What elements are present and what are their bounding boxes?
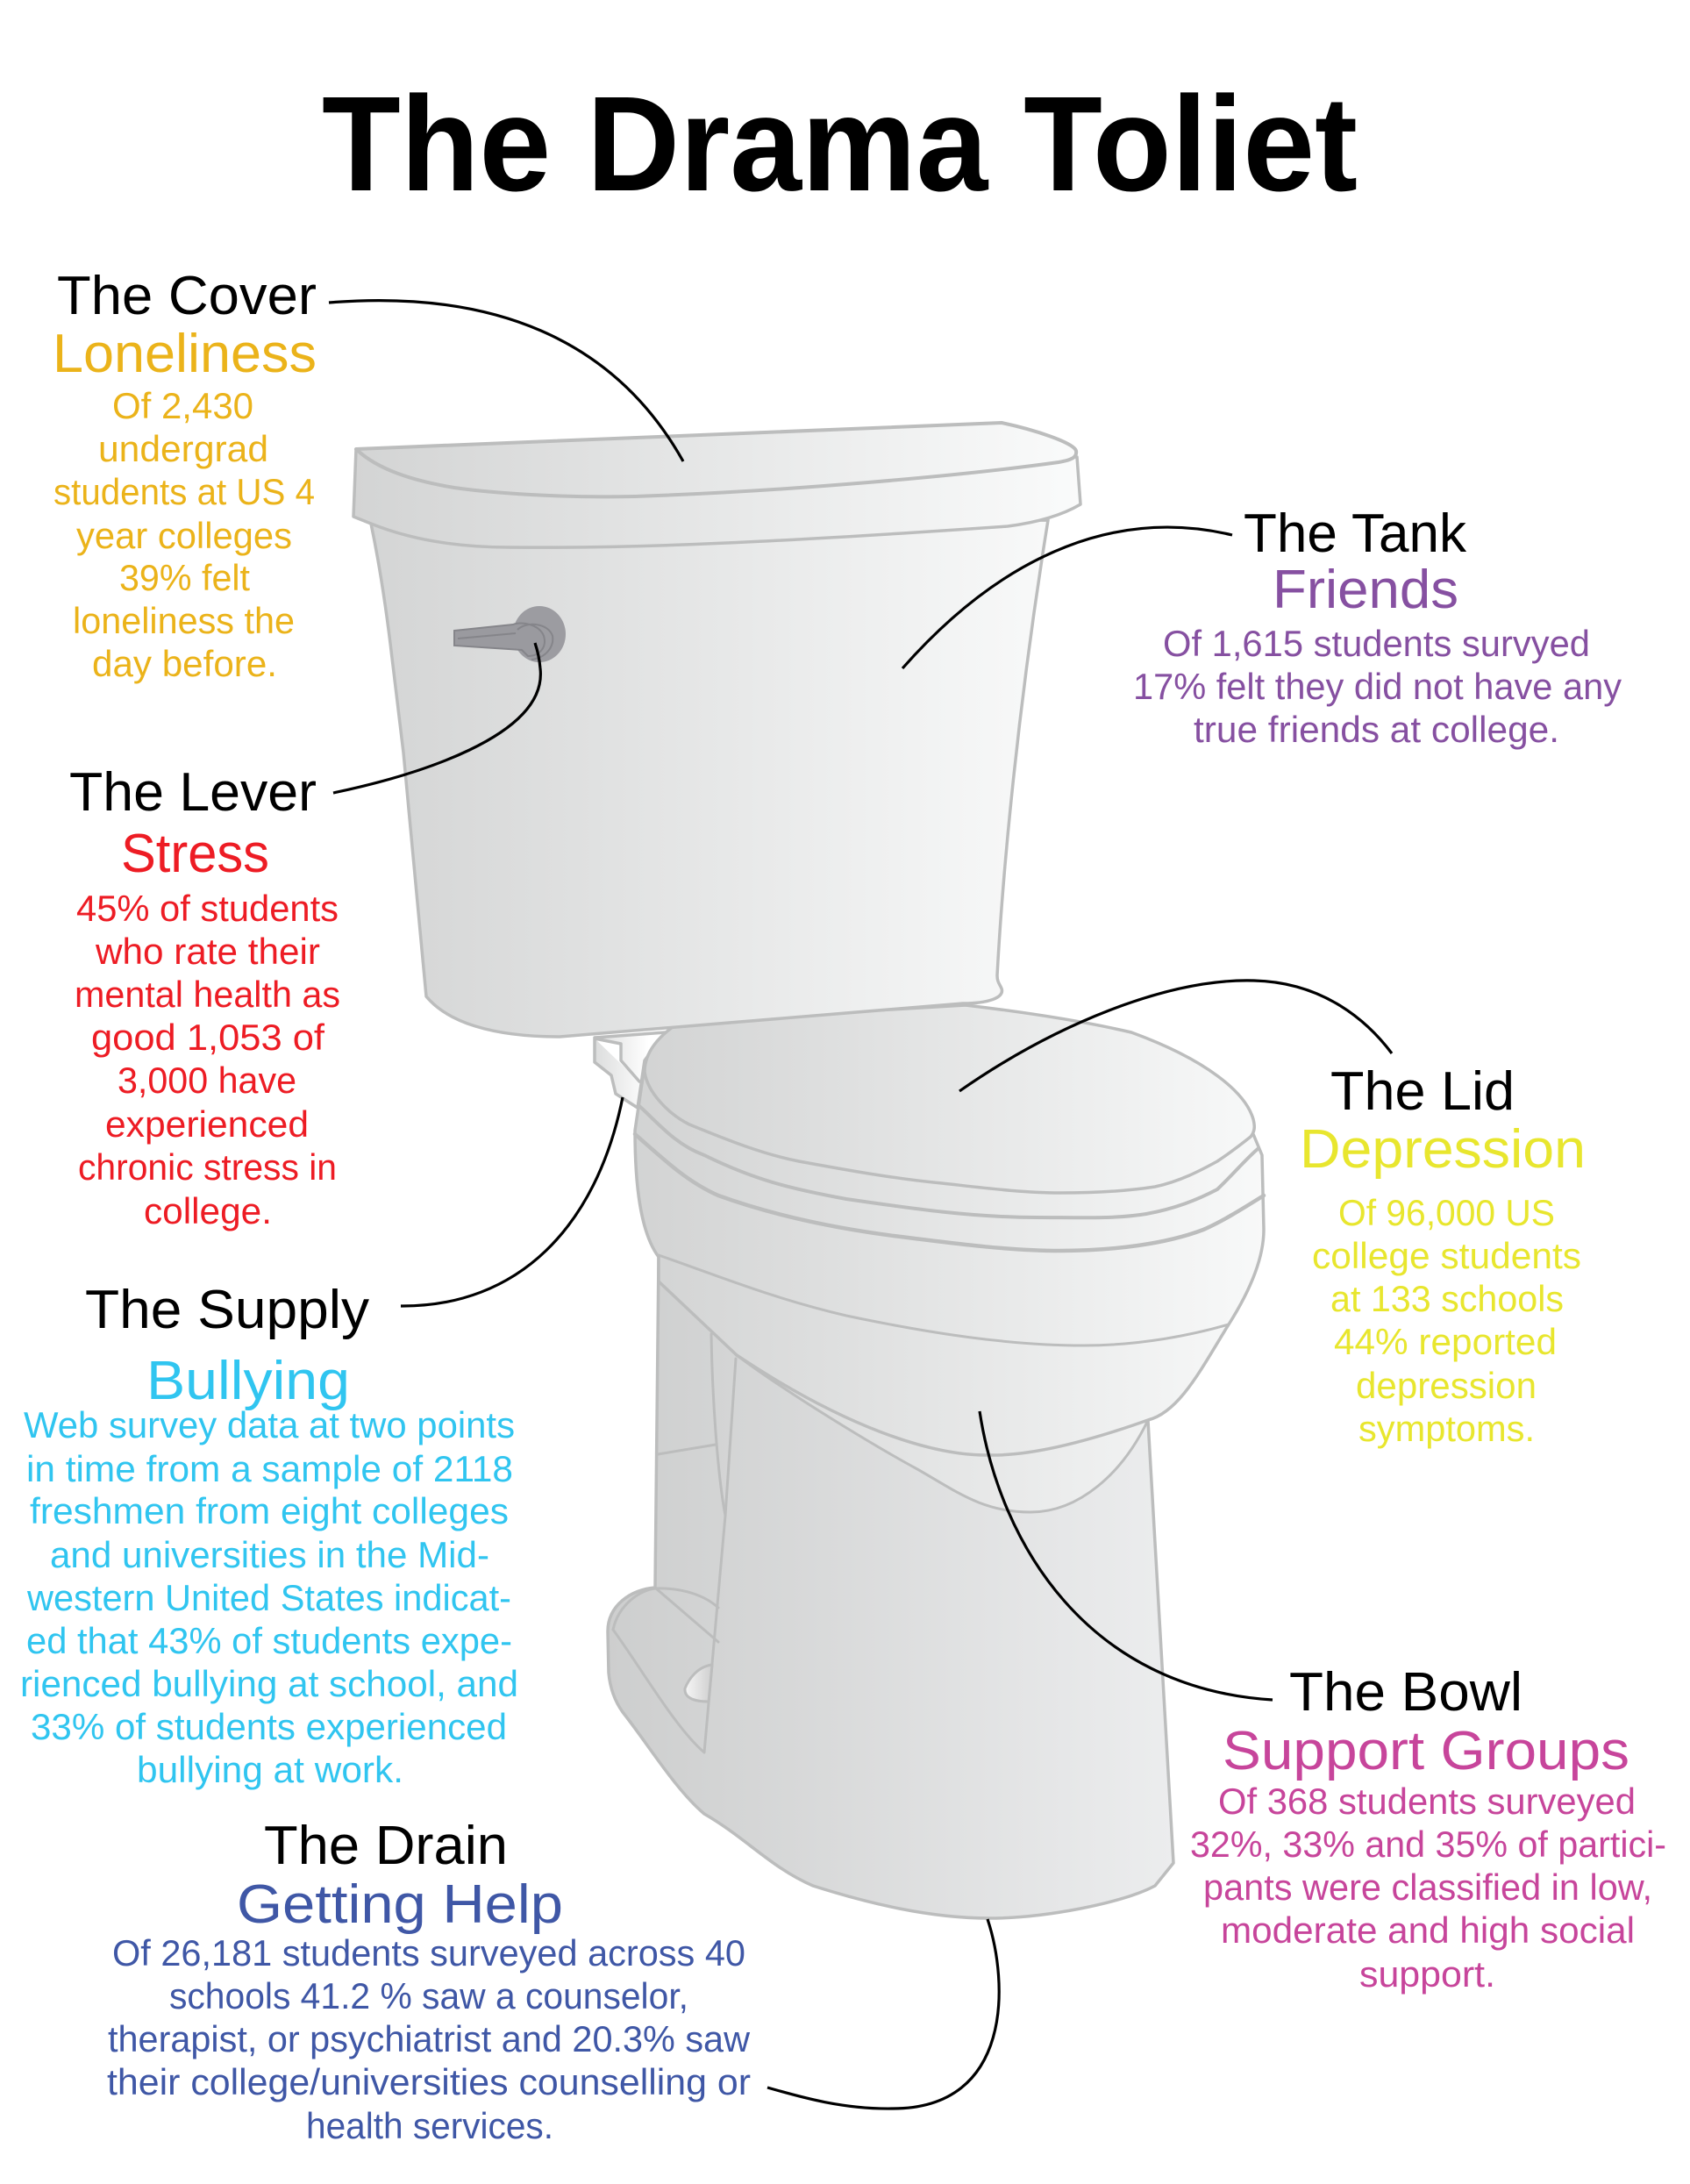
statistic text: good 1,053 of [91, 1017, 324, 1058]
statistic text [1312, 1192, 1581, 1449]
statistic text: rienced bullying at school, and [20, 1663, 518, 1704]
leader line: cover [329, 301, 683, 461]
statistic text [1133, 623, 1622, 750]
statistic text: who rate their [95, 931, 320, 972]
statistic text: undergrad [98, 428, 268, 469]
topic heading: Bullying [146, 1351, 350, 1411]
statistic text: therapist, or psychiatrist and 20.3% saw [108, 2018, 751, 2059]
toilet tank body [371, 520, 1048, 1037]
statistic text: western United States indicat- [26, 1577, 511, 1618]
statistic text: 17% felt they did not have any [1133, 666, 1622, 707]
statistic text: Of 26,181 students surveyed across 40 [112, 1932, 745, 1973]
part name: The Drain [264, 1816, 508, 1876]
statistic text: chronic stress in [78, 1146, 337, 1188]
statistic text: Of 2,430 [112, 385, 253, 426]
statistic text: health services. [306, 2105, 553, 2146]
statistic text: schools 41.2 % saw a counselor, [169, 1975, 688, 2016]
statistic text: students at US 4 [53, 471, 315, 512]
statistic text: Web survey data at two points [24, 1404, 515, 1445]
part name: The Tank [1244, 503, 1467, 564]
part name: The Lever [69, 762, 317, 823]
toilet bowl [635, 1066, 1264, 1455]
part name: The Cover [57, 266, 317, 326]
statistic text [20, 1404, 518, 1790]
statistic text: 3,000 have [118, 1060, 296, 1101]
statistic text: 33% of students experienced [31, 1706, 507, 1747]
panel: the lever, stress [69, 762, 340, 1231]
statistic text: loneliness the [73, 600, 295, 641]
toilet illustration [353, 423, 1264, 1918]
statistic text: support. [1359, 1953, 1495, 1995]
leader line: supply [401, 1097, 623, 1306]
topic heading: Support Groups [1223, 1721, 1629, 1781]
toilet supply valve [595, 1032, 666, 1108]
statistic text: college. [144, 1190, 272, 1231]
panel: the lid, depression [1300, 1061, 1586, 1449]
statistic text: moderate and high social [1221, 1909, 1635, 1951]
leader line: lever [333, 643, 540, 793]
panel: the tank, friends [1133, 503, 1622, 750]
statistic text [1190, 1781, 1666, 1995]
topic heading: Depression [1300, 1119, 1586, 1180]
statistic text: ed that 43% of students expe- [26, 1620, 512, 1661]
part name: The Bowl [1289, 1662, 1522, 1723]
statistic text: pants were classified in low, [1203, 1866, 1652, 1908]
toilet pedestal and foot [608, 1257, 1173, 1918]
panel: the supply, bullying [20, 1280, 518, 1790]
panel: the drain, getting help [107, 1816, 751, 2146]
statistic text: day before. [92, 643, 277, 684]
topic heading: Loneliness [53, 324, 317, 384]
panel: the bowl, support groups [1190, 1662, 1666, 1995]
statistic text [107, 1932, 751, 2146]
statistic text: 44% reported [1334, 1321, 1557, 1362]
statistic text: and universities in the Mid- [50, 1534, 489, 1575]
part name: The Supply [85, 1280, 369, 1340]
statistic text: Of 96,000 US [1338, 1192, 1555, 1233]
statistic text [75, 888, 340, 1231]
statistic text: their college/universities counselling or [107, 2061, 751, 2102]
title: The Drama Toliet [322, 68, 1358, 219]
statistic text: at 133 schools [1330, 1278, 1564, 1319]
leader line: drain [767, 1919, 999, 2109]
statistic text: Of 1,615 students survyed [1163, 623, 1590, 664]
icon: flush lever [454, 606, 566, 662]
statistic text: mental health as [75, 974, 340, 1015]
statistic text: freshmen from eight colleges [30, 1490, 509, 1531]
toilet lid [645, 1005, 1254, 1193]
statistic text: experienced [105, 1103, 309, 1145]
panel: the cover, loneliness [53, 266, 317, 684]
statistic text: 45% of students [76, 888, 339, 929]
statistic text: depression [1356, 1365, 1537, 1406]
statistic text: bullying at work. [137, 1749, 403, 1790]
statistic text: college students [1312, 1235, 1581, 1276]
statistic text: Of 368 students surveyed [1218, 1781, 1636, 1822]
statistic text: true friends at college. [1194, 709, 1559, 750]
toilet trapway bulge [737, 1355, 1148, 1512]
statistic text: in time from a sample of 2118 [26, 1448, 513, 1489]
statistic text: 32%, 33% and 35% of partici- [1190, 1824, 1666, 1865]
tank cover side [353, 449, 1080, 547]
statistic text: year colleges [76, 515, 292, 556]
leader line: tank [902, 527, 1232, 668]
statistic text [53, 385, 315, 684]
tank cover top [356, 423, 1076, 496]
leader line: lid [959, 981, 1392, 1091]
topic heading: Stress [121, 824, 269, 884]
statistic text: 39% felt [119, 557, 250, 598]
part name: The Lid [1330, 1061, 1515, 1122]
topic heading: Getting Help [237, 1874, 563, 1935]
topic heading: Friends [1273, 560, 1458, 620]
statistic text: symptoms. [1358, 1408, 1535, 1449]
leader line: bowl [980, 1411, 1273, 1700]
toilet seat [635, 1106, 1264, 1251]
